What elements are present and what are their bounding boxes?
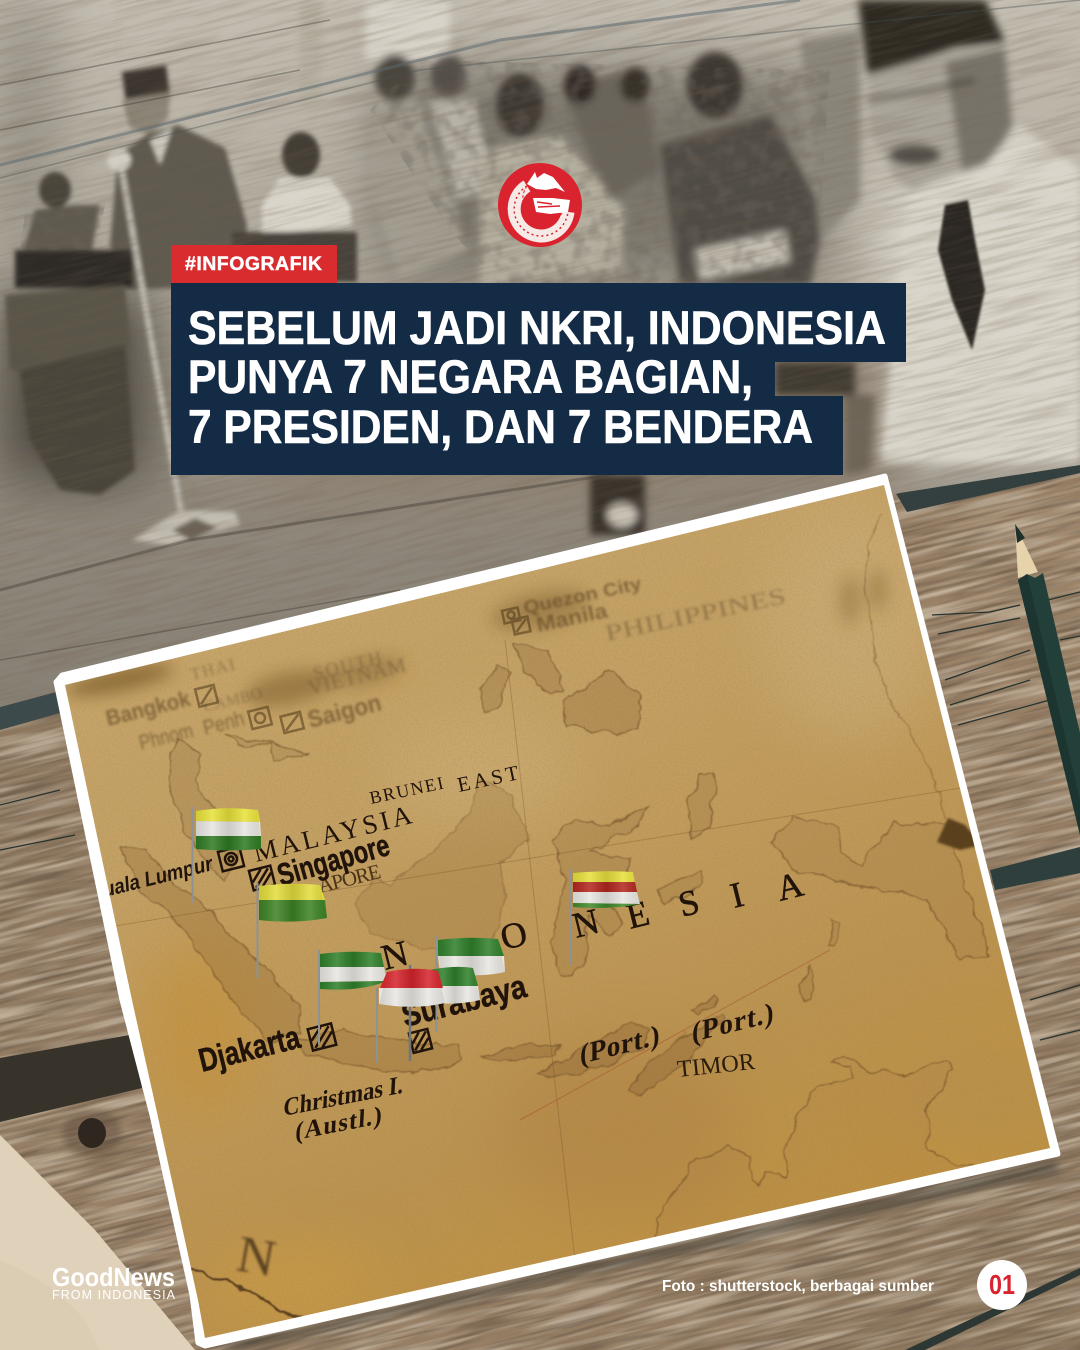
faded regional labels: Saigon xyxy=(305,689,384,734)
flag 2: yellow green xyxy=(258,883,327,978)
sea and state labels: BRUNEI xyxy=(368,773,445,808)
page number xyxy=(977,1260,1027,1310)
land: New Guinea east coast xyxy=(865,513,947,817)
faded regional labels: Phnom xyxy=(137,719,196,755)
land: Australia xyxy=(640,1055,1060,1300)
sea and state labels: Christmas I. xyxy=(283,1070,404,1122)
flag 7: yellow red white green xyxy=(570,869,640,965)
panel: vintage map of Indonesia xyxy=(56,476,1080,1346)
photo figure: speaker at the microphone xyxy=(5,65,357,545)
land: Sulawesi xyxy=(550,807,645,975)
sea and state labels: I xyxy=(726,874,748,916)
faded regional labels: Penh xyxy=(201,707,247,740)
flag 6: green white, upper xyxy=(436,936,505,1032)
land: Philippines xyxy=(480,645,640,735)
wood plank gaps xyxy=(0,465,1080,1350)
page number: 01 xyxy=(989,1269,1015,1300)
flag 5: green white, lower xyxy=(410,965,480,1061)
sea and state labels: N xyxy=(233,1226,280,1288)
map grid lines xyxy=(90,640,1010,1260)
map stains and tone xyxy=(140,500,1080,1310)
logo: GNFI emblem xyxy=(498,163,582,247)
map labels xyxy=(101,573,807,1288)
city labels: uala Lumpur xyxy=(101,852,216,902)
wood cracks xyxy=(0,592,1080,1040)
land: Maluku and small islands xyxy=(655,775,838,1000)
photo figure: necktie xyxy=(938,200,985,350)
sea and state labels: N xyxy=(568,901,603,946)
flag 1: yellow white green xyxy=(192,807,261,903)
sea and state labels: (Port.) xyxy=(692,997,774,1049)
map labels: PHILIPPINES xyxy=(603,583,788,646)
map white border xyxy=(56,476,1058,1346)
faded regional labels xyxy=(103,573,643,755)
city labels xyxy=(101,827,530,1079)
land: Java xyxy=(295,1030,462,1072)
map land masses xyxy=(122,513,1060,1325)
flag 3: green white green xyxy=(319,950,387,1045)
city labels: Surabaya xyxy=(398,967,530,1034)
sea and state labels: A xyxy=(772,864,807,909)
background: wooden table xyxy=(0,460,1080,1350)
sea and state labels: TIMOR xyxy=(676,1049,756,1083)
flag 4: red white xyxy=(377,969,445,1063)
sea and state labels: EAST xyxy=(455,760,521,797)
map shadow on table xyxy=(210,1160,1060,1350)
sea and state labels xyxy=(233,760,807,1288)
city labels: Singapore xyxy=(273,827,393,893)
map labels: VIETNAM xyxy=(305,652,409,700)
land: Lesser Sunda islands xyxy=(480,995,726,1095)
sea and state labels: (Austl.) xyxy=(295,1101,383,1146)
photo figure: portrait of the man on the right xyxy=(858,0,1080,462)
logo: GoodNews from Indonesia: GoodNews xyxy=(52,1262,175,1292)
land: bottom-left stained coast xyxy=(188,1268,320,1325)
map surface xyxy=(60,480,1080,1340)
tag: #INFOGRAFIK: #INFOGRAFIK xyxy=(185,253,322,275)
land: Sumatra xyxy=(122,848,300,1042)
title block: PUNYA 7 NEGARA BAGIAN, xyxy=(188,350,753,403)
photo credit: Foto : shutterstock, berbagai sumber xyxy=(662,1278,934,1295)
wood knot xyxy=(62,1109,122,1157)
city labels: Djakarta xyxy=(195,1018,304,1079)
title block xyxy=(171,283,906,475)
land: Malay peninsula xyxy=(168,738,240,880)
sea and state labels: MALAYSIA xyxy=(250,799,415,868)
map labels: THAI xyxy=(188,654,237,684)
map dark burn mark xyxy=(937,818,982,850)
photo: scratches xyxy=(0,0,1080,660)
tag: #INFOGRAFIK xyxy=(171,245,337,283)
sea and state labels: N xyxy=(377,933,412,978)
title block: 7 PRESIDEN, DAN 7 BENDERA xyxy=(188,400,813,453)
land: Kalimantan xyxy=(352,780,528,960)
faded regional labels: Bangkok xyxy=(103,686,193,731)
map labels: CAMBO xyxy=(202,685,264,716)
logo: GoodNews from Indonesia: FROM INDONESIA xyxy=(52,1288,176,1302)
sea and state labels: S xyxy=(674,881,703,925)
aged paper corner xyxy=(0,1135,195,1350)
background: archival photograph xyxy=(0,0,1080,760)
title block: SEBELUM JADI NKRI, INDONESIA xyxy=(188,301,886,354)
faded regional labels: Quezon City xyxy=(522,573,643,618)
flags: the seven state flags on the map xyxy=(192,807,640,1063)
land: Papua xyxy=(770,817,990,960)
sea and state labels: O xyxy=(496,913,531,958)
sea and state labels: (Port.) xyxy=(580,1020,660,1071)
map labels: SOUTH xyxy=(311,647,384,685)
land: Indochina xyxy=(225,735,305,762)
city markers xyxy=(195,607,530,1053)
photo: column and crowd xyxy=(300,0,875,535)
sea and state labels: APORE xyxy=(315,859,383,898)
logo: GoodNews from Indonesia xyxy=(52,1262,176,1302)
sea and state labels: E xyxy=(622,893,653,937)
photo: wood-crack overlay xyxy=(0,0,1080,760)
icon: pencil xyxy=(1015,524,1080,835)
faded regional labels: Manila xyxy=(534,599,610,637)
